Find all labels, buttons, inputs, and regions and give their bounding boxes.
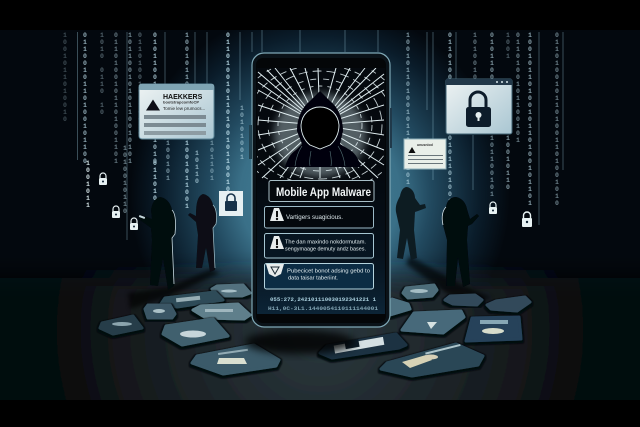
binary rain: left: 100101: [164, 140, 172, 182]
binary rain: right: 011010010110: [446, 32, 454, 116]
padlock icon: [466, 92, 491, 127]
binary readout: 055:272,242101110030192341221 1: [270, 296, 377, 303]
hacker figure: right back: [396, 187, 426, 260]
binary rain: right: 0110100101101001101001010: [554, 32, 560, 207]
pop-up: hackers warning: [139, 84, 214, 139]
warning icon: [270, 208, 284, 221]
binary rain: right: 1001011010010110100101: [404, 32, 412, 186]
shattered screen: [257, 68, 385, 180]
alert box 1: [264, 206, 374, 228]
title box: [269, 180, 374, 202]
title box: Mobile App Malware: [276, 185, 371, 199]
smartphone: [249, 52, 392, 328]
binary rain: left: 1001011010010: [62, 32, 68, 123]
binary rain: right: 1001011010010110100101101: [526, 32, 534, 207]
binary rain: left: 10110: [194, 150, 200, 185]
alert box 2: sengymaage demuty andz bases.: [285, 246, 366, 252]
binary rain: left: 0101100101001011010: [152, 32, 158, 165]
binary rain: left: 0110010110100101100: [82, 32, 88, 165]
binary rain: left: 01101010: [152, 160, 158, 216]
pop-up: hackers warning: Tomie lew prumocs...: [163, 106, 205, 111]
warning triangle: [146, 100, 160, 110]
binary rain: right: 10010110: [504, 135, 512, 191]
binary readout: [268, 296, 379, 312]
pop-up: hackers warning: bootstrapcomfoCP: [163, 100, 199, 104]
hacker figure: left front: [138, 197, 176, 290]
binary rain: left: 10101001: [238, 105, 246, 161]
alert box 1: Vartigers suagicious.: [286, 214, 343, 221]
shield icon: [266, 264, 284, 277]
alert box 3: [264, 264, 374, 289]
binary rain: left: 1011001010110010101: [126, 32, 134, 165]
binary rain: right: 1001: [504, 32, 512, 60]
binary rain: right: 1010010: [472, 32, 478, 81]
binary rain: left: 101101: [208, 140, 216, 182]
binary rain: right: 0110100101100101: [514, 32, 522, 144]
alert box 2: The dan maxindo nokdormutam.: [285, 240, 366, 246]
binary rain: left: 1010 0110 10: [98, 32, 106, 116]
alert box 3: Pubecicet bonot adsing gebd to: [287, 268, 370, 274]
phones scattered on floor: right: [320, 285, 530, 376]
hooded figure: [285, 91, 361, 167]
pop-up: hackers warning: HAEKKERS: [163, 94, 203, 101]
binary rain: right: 0101101001: [446, 135, 454, 205]
pop-up: small warning note: unusniod: [417, 143, 433, 147]
binary rain: left: 1001011: [84, 160, 92, 209]
binary rain: left: 011010010110010: [136, 32, 144, 137]
hacker figure: left back: [188, 194, 217, 272]
binary rain: left: 1001011001: [184, 140, 190, 210]
lock tile left of phone: [219, 191, 243, 216]
binary rain: left: 1010010110: [122, 145, 128, 215]
binary rain: right: [404, 32, 560, 207]
phone shadow: [245, 330, 355, 354]
hacker figure: right front: [442, 197, 479, 287]
binary rain: left: 1001011010: [184, 32, 190, 102]
shadows of hackers: [128, 256, 492, 309]
binary rain: right: 101100101: [488, 135, 496, 198]
alert box 2: [264, 234, 374, 258]
binary rain: thin streaks: [78, 30, 563, 240]
binary rain: left: [62, 32, 246, 216]
phones scattered on floor: left: [100, 285, 279, 374]
binary readout: H11,0C-3L1.1440054110111144001: [268, 305, 379, 312]
warning icon: [270, 236, 284, 249]
binary rain: left: 011010010110100101100101: [224, 32, 232, 200]
pop-up: small warning note: [404, 139, 446, 169]
pop-up: padlock window: [446, 79, 512, 134]
alert box 3: data taisar taberiint.: [288, 276, 338, 282]
binary rain: left: 0110100101101001101: [112, 32, 120, 165]
floating padlocks: [99, 173, 532, 230]
binary rain: right: 0101100101: [488, 32, 496, 102]
